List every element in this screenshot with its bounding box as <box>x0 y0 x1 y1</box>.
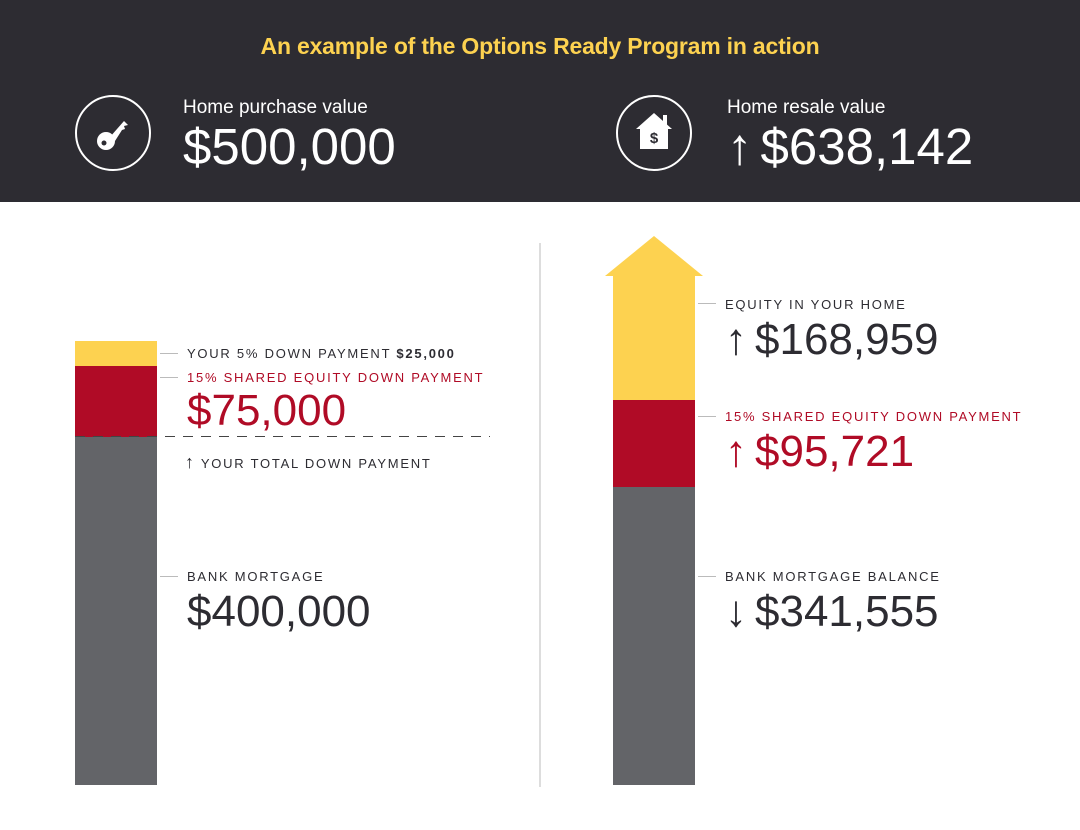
value: 168,959: ↑$168,959 <box>725 315 939 364</box>
right arrow bar chart <box>605 236 703 785</box>
label: 15% shared equity: 15% SHARED EQUITY DOWN PAYMENT <box>725 409 1022 424</box>
value: 75,000: $75,000 <box>187 386 346 435</box>
purchase value: Home purchase value <box>183 97 368 118</box>
label: your 5% down payment: YOUR 5% DOWN PAYMENT $25,000 <box>187 346 456 361</box>
label: bank mortgage: BANK MORTGAGE <box>187 569 324 584</box>
value: 341,555: ↓$341,555 <box>725 587 939 636</box>
title: An example of the Options Ready Program in action <box>261 33 819 59</box>
value: 95,721: ↑$95,721 <box>725 427 914 476</box>
resale value: ↑$638,142 <box>727 118 973 175</box>
resale value: Home resale value <box>727 97 885 118</box>
icon: house with dollar <box>616 95 692 171</box>
header band <box>0 0 1080 202</box>
left labels <box>160 346 484 636</box>
label: total down payment: ↑ YOUR TOTAL DOWN PAYMENT <box>185 452 432 472</box>
value: 400,000: $400,000 <box>187 587 371 636</box>
label: equity in your home: EQUITY IN YOUR HOME <box>725 297 907 312</box>
left bar chart <box>75 341 157 785</box>
icon: house with dollar: $ <box>650 130 659 147</box>
label: bank mortgage balance: BANK MORTGAGE BALANCE <box>725 569 941 584</box>
divider <box>539 243 541 787</box>
dashed line <box>75 436 490 437</box>
icon: key <box>75 95 151 171</box>
purchase value: $500,000 <box>183 118 396 175</box>
label: 15% shared equity: 15% SHARED EQUITY DOWN PAYMENT <box>187 370 484 385</box>
right labels <box>698 297 1022 636</box>
